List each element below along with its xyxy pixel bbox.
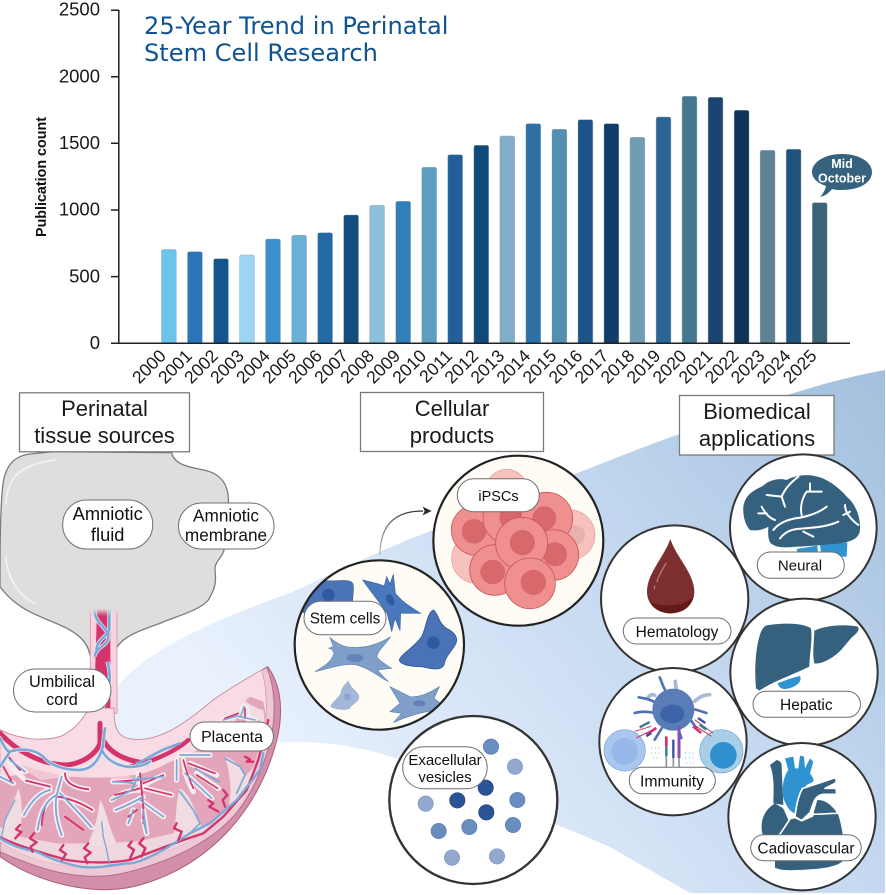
x axis year labels: 2010 — [388, 346, 430, 388]
placenta outer rim — [0, 667, 281, 890]
heading: cellular products: products — [410, 423, 494, 448]
x axis year labels: 2022 — [701, 346, 743, 388]
bars — [162, 96, 827, 344]
title: 25-Year Trend in Perinatal — [144, 12, 448, 40]
y axis tick labels — [59, 0, 100, 353]
y axis tick labels: 1500 — [59, 132, 100, 153]
label: cardiovascular: Cadiovascular — [758, 840, 854, 858]
x axis year labels: 2011 — [415, 346, 456, 387]
stem cell 3 — [399, 610, 457, 669]
y axis tick labels: 2000 — [59, 65, 100, 86]
label: hepatic: Hepatic — [780, 697, 833, 714]
iPSC cells — [451, 492, 579, 609]
label: iPSCs: iPSCs — [478, 489, 519, 505]
x axis year labels: 2003 — [206, 346, 248, 388]
callout: mid October — [812, 154, 872, 197]
circle: stem cells — [295, 560, 464, 730]
circle: hepatic — [730, 599, 878, 746]
amniotic sac — [0, 452, 228, 655]
label: amniotic membrane: membrane — [185, 525, 267, 545]
heading: perinatal tissue sources — [20, 393, 190, 452]
x axis year labels: 2001 — [154, 346, 196, 388]
heading: biomedical applications: applications — [699, 426, 815, 451]
y axis tick labels: 500 — [69, 266, 100, 286]
stem cell 6 — [390, 687, 441, 723]
pale septa — [2, 698, 265, 847]
x axis year labels: 2004 — [232, 346, 274, 388]
label: immunity — [629, 767, 715, 794]
label: extracellular vesicles: vesicles — [418, 769, 472, 786]
label: umbilical cord: cord — [46, 691, 78, 709]
vesicles — [418, 739, 525, 865]
label: amniotic membrane — [178, 503, 274, 549]
circle: immunity — [599, 668, 747, 815]
heading: biomedical applications: Biomedical — [703, 399, 811, 424]
label: amniotic fluid — [63, 500, 153, 549]
title — [144, 12, 448, 67]
pale tissue accents — [17, 765, 133, 782]
label: umbilical cord — [14, 669, 111, 712]
label: placenta: Placenta — [201, 729, 263, 746]
villous trees — [0, 707, 255, 835]
x axis year labels: 2019 — [623, 346, 664, 388]
x axis year labels: 2018 — [597, 346, 638, 388]
placenta base band — [0, 740, 263, 867]
circle: hematology — [601, 525, 748, 673]
label: immunity: Immunity — [640, 774, 704, 790]
x axis year labels — [128, 346, 821, 388]
x axis year labels: 2009 — [362, 346, 404, 388]
label: stem cells — [304, 601, 386, 635]
heading: perinatal tissue sources: Perinatal — [61, 396, 148, 421]
arrow: stem cells to iPSCs — [380, 507, 432, 555]
x axis year labels: 2020 — [649, 346, 691, 388]
x axis year labels: 2013 — [466, 346, 508, 388]
bar chart: publication count 2000-2025 — [34, 0, 872, 388]
x axis year labels: 2015 — [519, 346, 560, 388]
circle: iPSCs — [433, 456, 603, 626]
label: neural: Neural — [778, 558, 822, 574]
label: neural — [757, 552, 844, 578]
placenta tissue — [0, 697, 267, 843]
pale background cells — [452, 469, 595, 583]
stem cell 4 — [315, 637, 392, 682]
x axis year labels: 2017 — [571, 346, 612, 388]
placenta chorionic plate — [0, 670, 266, 867]
label: hematology — [623, 618, 731, 644]
stem cell 1 — [302, 580, 354, 614]
label: stem cells: Stem cells — [310, 610, 381, 628]
stem cell 2 — [363, 574, 421, 632]
circle: extracellular vesicles — [389, 716, 557, 884]
x axis year labels: 2024 — [753, 346, 795, 388]
label: extracellular vesicles — [403, 747, 487, 789]
axes and ticks — [111, 10, 850, 343]
label: amniotic fluid: Amniotic — [73, 503, 143, 524]
x axis year labels: 2012 — [440, 346, 482, 388]
x axis year labels: 2023 — [727, 346, 769, 388]
heading: cellular products — [360, 392, 544, 452]
sac highlight — [6, 460, 55, 604]
umbilical cord — [88, 609, 119, 733]
label: amniotic membrane: Amniotic — [193, 506, 259, 526]
x axis year labels: 2014 — [492, 346, 534, 388]
x axis year labels: 2025 — [779, 346, 821, 388]
heading: perinatal tissue sources: tissue sources — [34, 423, 175, 448]
x axis year labels: 2007 — [310, 346, 352, 388]
label: amniotic fluid: fluid — [91, 524, 124, 545]
heading: biomedical applications — [680, 396, 834, 455]
label: hematology: Hematology — [636, 624, 719, 641]
label: hepatic — [753, 691, 860, 717]
label: extracellular vesicles: Exacellular — [408, 752, 482, 769]
basal plate vessels — [0, 720, 268, 867]
icon: immune synapse — [604, 677, 743, 773]
x axis year labels: 2016 — [545, 346, 586, 388]
placenta — [0, 667, 281, 890]
background funnel — [115, 370, 885, 893]
panel: cellular products — [295, 456, 603, 884]
label: iPSCs — [457, 479, 539, 512]
panel: perinatal tissue illustration — [0, 452, 281, 890]
x axis year labels: 2006 — [284, 346, 326, 388]
callout: mid October: October — [818, 172, 866, 186]
panel: biomedical applications — [599, 454, 878, 890]
x axis year labels: 2005 — [258, 346, 300, 388]
y axis title: Publication count — [34, 117, 50, 237]
x axis year labels: 2008 — [336, 346, 378, 388]
label: placenta — [190, 722, 274, 751]
x axis year labels: 2002 — [180, 346, 222, 388]
title: Stem Cell Research — [144, 39, 378, 67]
x axis year labels: 2000 — [128, 346, 170, 388]
main chorionic vessels — [0, 723, 188, 770]
icon: liver — [755, 624, 859, 691]
icon: blood drop — [647, 539, 694, 613]
heading: cellular products: Cellular — [415, 396, 489, 421]
label: umbilical cord: Umbilical — [29, 673, 95, 691]
circle: neural — [730, 454, 877, 601]
circle: cardiovascular — [728, 743, 876, 890]
callout: mid October: Mid — [831, 157, 853, 171]
icon: heart — [762, 756, 845, 870]
stem cell 5 — [331, 681, 359, 710]
icon: brain — [743, 475, 860, 557]
x axis year labels: 2021 — [675, 346, 716, 388]
y axis tick labels: 0 — [90, 332, 100, 353]
label: cardiovascular — [751, 835, 861, 861]
y axis tick labels: 1000 — [59, 198, 100, 220]
placenta pale inner wall — [0, 667, 274, 876]
